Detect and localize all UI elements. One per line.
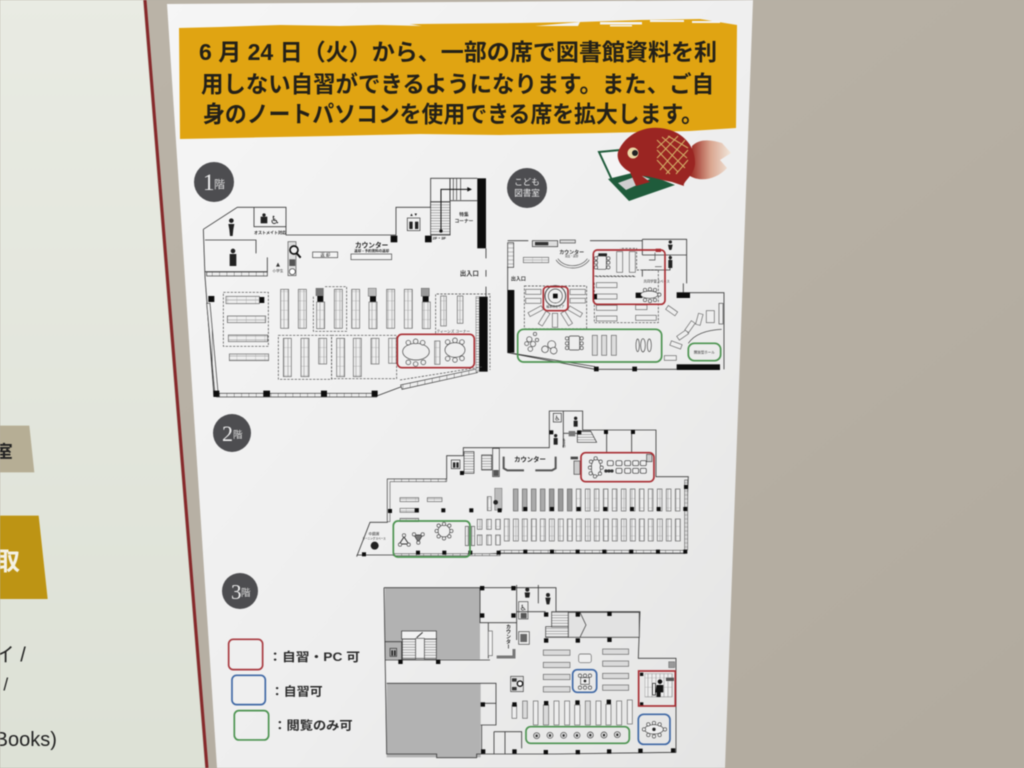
blue seating: right xyxy=(638,714,670,744)
restroom icons xyxy=(228,213,267,266)
accessible toilet: ♿︎ xyxy=(270,213,280,227)
floor plan: 1F xyxy=(203,178,490,397)
counter: カウンター xyxy=(355,241,389,250)
floor plan: 2F xyxy=(357,411,688,557)
1F small signs: 小学生 xyxy=(273,268,284,273)
floor badge: 1F xyxy=(194,162,234,202)
3F stairs xyxy=(402,612,568,659)
counter: 返却・予約資料の返却 xyxy=(354,248,390,253)
stairs xyxy=(431,178,472,240)
special corner label: コーナー xyxy=(455,218,474,224)
body xyxy=(618,128,695,186)
icon: fish mascot with laptop xyxy=(599,128,731,201)
eye xyxy=(628,148,638,158)
columns xyxy=(362,430,688,556)
dashed zones xyxy=(524,248,658,329)
headline text: 用しない自習ができるようになります。また、ご自 xyxy=(201,71,714,97)
floor badge: 1F: 1 xyxy=(203,170,214,195)
floor badge: 2F: 階 xyxy=(233,430,243,441)
counter xyxy=(523,249,588,267)
green zone: small hall xyxy=(688,329,722,361)
headline text xyxy=(199,39,717,127)
restroom and elevator icons: ♿︎ xyxy=(554,414,560,422)
room label: 中庭席 xyxy=(369,531,380,536)
floor plan: 3F xyxy=(384,585,676,758)
dashed zones xyxy=(223,287,490,380)
columns xyxy=(398,586,675,754)
green reading zone xyxy=(526,727,629,743)
red seating: PC room xyxy=(639,671,675,706)
tan label xyxy=(0,426,34,472)
shelves xyxy=(512,649,632,725)
counter: 貸出・返却 xyxy=(565,254,579,258)
board text lines: / xyxy=(3,675,8,695)
elevator xyxy=(407,212,420,231)
floor badge: 3F xyxy=(222,573,258,609)
walls xyxy=(384,585,676,758)
legend xyxy=(229,639,360,740)
room label: ラーニングスペース xyxy=(362,536,386,540)
scales xyxy=(657,136,688,174)
kids corner label: ティーンズ コーナー xyxy=(437,329,470,334)
accessible toilet: オストメイト対応 xyxy=(254,229,286,235)
elevator: ▲▼ xyxy=(409,212,418,217)
poster sheet xyxy=(167,0,753,768)
headline text: 6 月 24 日（火）から、一部の席で図書館資料を利 xyxy=(199,39,717,65)
board red edge xyxy=(145,0,207,768)
red seating zone xyxy=(397,334,474,368)
floor badge: 2F: 2 xyxy=(222,421,233,446)
red seating: upper xyxy=(593,250,670,304)
blue seating: center xyxy=(573,670,597,692)
green reading zone xyxy=(518,329,662,362)
red seating: round: 絵本のエリア xyxy=(546,304,564,309)
counter: カウンター xyxy=(559,249,584,256)
stairs: 2F・3F xyxy=(433,235,446,240)
counter xyxy=(497,624,514,657)
floor badge: children's room: こども xyxy=(514,177,540,187)
walls xyxy=(357,411,688,557)
tail xyxy=(690,140,731,179)
restroom and elevator icons: 多目的 xyxy=(562,437,566,448)
floor badge: children's room xyxy=(507,168,547,208)
kiosk xyxy=(493,488,502,510)
shelves upper xyxy=(513,489,572,511)
legend: reading only: ：閲覧のみ可 xyxy=(273,717,353,732)
floor badge: 1F: 階 xyxy=(214,178,225,191)
kiosk xyxy=(511,676,523,692)
counter xyxy=(504,455,556,470)
floor badge: children's room: 図書室 xyxy=(514,188,540,198)
red seating: round xyxy=(543,286,568,311)
restroom icons xyxy=(390,588,551,656)
special corner label xyxy=(455,211,474,224)
counter: カウンター xyxy=(514,455,546,464)
floor badge: 3F: 3 xyxy=(231,580,242,604)
room label xyxy=(362,531,386,550)
red seating: upper: 共同学習スペース xyxy=(644,279,670,284)
walls xyxy=(508,239,724,371)
restroom icons: ♿︎ xyxy=(520,603,527,612)
shelves lower xyxy=(465,497,680,546)
headline text: 身のノートパソコンを使用できる席を拡大します。 xyxy=(203,101,703,127)
corridor xyxy=(568,612,639,637)
restroom and elevator icons xyxy=(451,413,578,469)
green zone: small hall: 開放型ホール xyxy=(694,350,715,355)
counter: カウンター xyxy=(505,624,511,649)
legend: study only: ：自習可 xyxy=(271,683,323,698)
board text lines xyxy=(0,645,57,751)
shelves xyxy=(281,289,463,377)
restroom icons xyxy=(656,240,673,268)
grey closed areas xyxy=(385,588,481,757)
search kiosk xyxy=(288,242,301,276)
stairs xyxy=(464,431,597,477)
entrance label: 出入口 xyxy=(511,275,526,282)
columns xyxy=(208,236,432,397)
left board fragments xyxy=(0,426,57,751)
counter xyxy=(313,241,392,260)
banner torn edge flecks xyxy=(600,20,720,26)
entrance label: 出入口 xyxy=(460,268,479,277)
sign xyxy=(669,662,675,668)
red seating zone xyxy=(571,453,654,482)
legend: study and PC: ：自習・PC 可 xyxy=(268,649,360,664)
green reading zone xyxy=(393,521,470,557)
accessible toilet xyxy=(254,213,286,235)
1F small signs xyxy=(273,263,429,296)
floor plan: children's library xyxy=(508,239,724,371)
special corner label: 特集 xyxy=(459,211,469,218)
walls xyxy=(203,178,488,397)
counter: 返 却 xyxy=(320,252,330,259)
floor badge: 2F xyxy=(213,414,251,452)
left notice board xyxy=(0,0,207,768)
gold label xyxy=(0,516,48,599)
shelves xyxy=(526,252,714,360)
laptop xyxy=(599,150,675,201)
headline banner xyxy=(179,19,737,139)
floor badge: 3F: 階 xyxy=(241,588,251,599)
